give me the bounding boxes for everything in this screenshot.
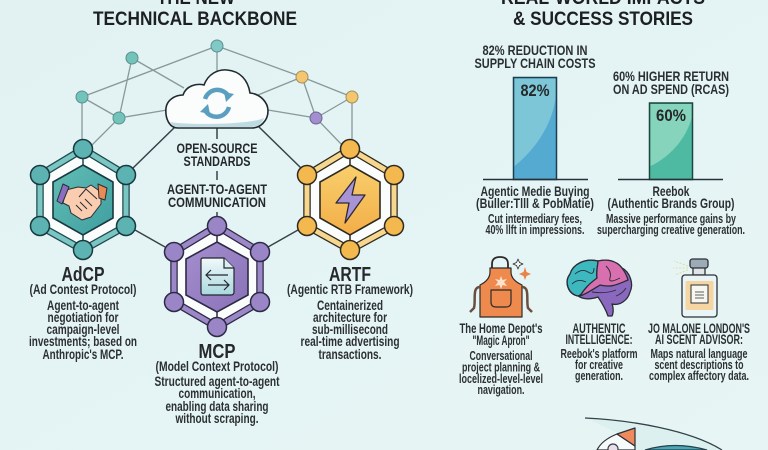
network connector lines: [82, 46, 352, 149]
text block: ARTF: architecture for: [313, 310, 388, 325]
heading: 60% higher return: ON AD SPEND (RCAS): [613, 81, 729, 97]
text block: the home depot's magic apron: navigation.: [478, 382, 524, 397]
text block: MCP: MCP: [198, 341, 236, 363]
title: the new technical backbone: [93, 0, 297, 30]
icon: lightning bolt: [336, 177, 365, 223]
text block: MCP: [154, 341, 280, 426]
heading: 60% higher return: 60% HIGHER RETURN: [613, 68, 729, 84]
text block: MCP: (Model Context Protocol): [156, 358, 278, 374]
caption: agentic media buying: 40% llft in impressions.: [486, 222, 584, 237]
text block: ARTF: transactions.: [318, 347, 382, 362]
caption: reebok: Reebok: [652, 183, 690, 199]
text block: AdCP: negotiation for: [48, 310, 119, 325]
title: the new technical backbone: TECHNICAL BACKBONE: [93, 8, 297, 30]
bar chart: 82%: 82%: [520, 81, 550, 100]
hexagon: AdCP: [30, 140, 136, 260]
text block: the home depot's magic apron: project planning &: [462, 360, 540, 374]
heading: 82% reduction: 82% REDUCTION IN: [482, 42, 588, 58]
text block: ARTF: Centainerized: [317, 298, 383, 313]
caption: agentic media buying: [476, 183, 594, 237]
text block: MCP: enabling data sharing: [166, 399, 268, 414]
icon: cloud with sync arrows: [166, 70, 268, 128]
caption: reebok: [597, 183, 745, 237]
text block: AdCP: [29, 264, 137, 362]
text block: the home depot's magic apron: Conversational: [470, 348, 532, 363]
center labels: open-source standards: [176, 140, 258, 169]
hub connector lines: [133, 127, 301, 247]
hexagon: MCP: [164, 216, 270, 336]
center labels: open-source standards: OPEN-SOURCE: [176, 140, 258, 156]
text block: the home depot's magic apron: "Magic Apron": [472, 332, 530, 348]
icon: perfume bottle: [673, 259, 717, 317]
heading: 82% reduction: SUPPLY CHAIN COSTS: [474, 55, 596, 71]
center labels: agent-to-agent communication: AGENT-TO-AGENT: [167, 181, 267, 197]
text block: MCP: communication,: [178, 386, 256, 401]
title: real-world impacts and success stories: & SUCCESS STORIES: [513, 8, 693, 30]
network nodes: [76, 40, 358, 124]
caption: agentic media buying: Cut intermediary fees,: [488, 211, 582, 226]
text block: ARTF: real-time advertising: [300, 334, 400, 349]
text block: ARTF: sub-millisecond: [312, 322, 388, 337]
heading: 60% higher return: [613, 68, 729, 97]
text block: authentic intelligence: INTELLIGENCE:: [566, 331, 632, 347]
text block: AdCP: campaign-level: [46, 322, 120, 337]
caption: agentic media buying: (Buller:Tlll & PobMatie): [476, 195, 594, 211]
bar chart: 82%: [483, 78, 588, 180]
text block: AdCP: Anthropic's MCP.: [42, 347, 124, 362]
text block: authentic intelligence: generation.: [575, 368, 623, 383]
icon: brain: [567, 260, 632, 316]
icon: handshake: [57, 184, 107, 220]
text block: the home depot's magic apron: The Home Depot's: [460, 320, 543, 336]
text block: ARTF: (Agentic RTB Framework): [287, 281, 413, 297]
text block: AdCP: Agent-to-agent: [47, 298, 119, 313]
caption: agentic media buying: Agentic Medie Buying: [480, 183, 590, 199]
text block: MCP: Structured agent-to-agent: [154, 374, 280, 389]
text block: AdCP: investments; based on: [29, 334, 137, 349]
text block: ARTF: [287, 264, 413, 362]
bar chart: 60%: 60%: [656, 106, 686, 125]
heading: 82% reduction: [474, 42, 596, 71]
center labels: open-source standards: STANDARDS: [184, 153, 250, 169]
bar chart: 60%: [618, 103, 723, 180]
icon: apron: [470, 257, 532, 317]
text block: ARTF: ARTF: [329, 264, 371, 286]
title: real-world impacts and success stories: [501, 0, 705, 30]
center labels: agent-to-agent communication: [167, 181, 267, 210]
text block: AdCP: AdCP: [62, 264, 104, 286]
text block: authentic intelligence: Reebok's platform: [560, 346, 638, 361]
center labels: agent-to-agent communication: COMMUNICATION: [168, 194, 266, 210]
icon: document with arrows: [201, 258, 234, 295]
text block: AdCP: (Ad Contest Protocol): [30, 281, 136, 297]
text block: authentic intelligence: AUTHENTIC: [572, 320, 626, 336]
text block: jo malone london's ai scent advisor: [648, 320, 750, 383]
text block: MCP: without scraping.: [175, 411, 258, 426]
text block: authentic intelligence: [560, 320, 638, 383]
text block: the home depot's magic apron: locelized-level-level: [459, 371, 543, 386]
icon: rocket and swoosh: [585, 418, 722, 450]
text block: the home depot's magic apron: [459, 320, 543, 397]
hexagon: ARTF: [298, 140, 404, 260]
text block: authentic intelligence: for creative: [575, 357, 623, 372]
